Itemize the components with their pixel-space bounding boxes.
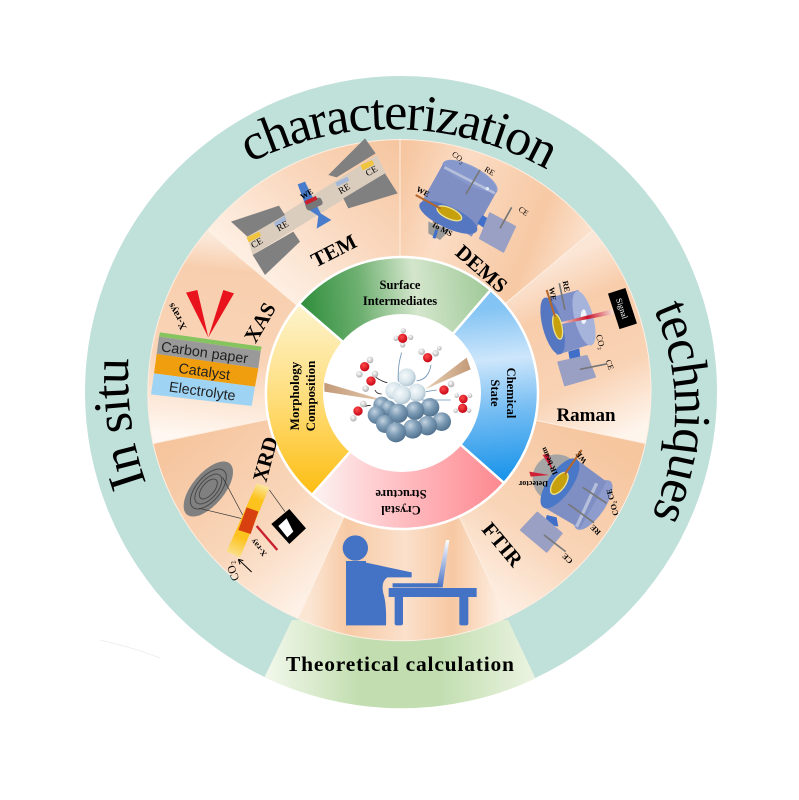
diagram: XAS stack: Carbon paper — [160, 339, 249, 367]
diagram: DEMS cell: WE — [415, 185, 431, 199]
diagram: DEMS cell: To MS — [430, 220, 454, 239]
diagram: DEMS cell: RE — [483, 165, 496, 178]
diagram: Raman cell: CE — [604, 358, 616, 371]
label: Surface Intermediates: Intermediates — [363, 294, 437, 308]
diagram: DEMS cell: CE — [517, 205, 530, 218]
sector: chemical state — [402, 290, 538, 483]
diagram: XRD setup: CO₂ — [224, 560, 242, 582]
sector: TEM — [207, 140, 400, 392]
diagram: Raman cell: Signal — [614, 297, 629, 321]
label: Morphology Composition: Morphology — [287, 361, 302, 430]
label: TEM: TEM — [307, 229, 361, 272]
diagram: TEM cell: CE — [250, 236, 265, 251]
diagram: TEM cell: RE — [275, 219, 291, 234]
diagram: Raman cell: CO₂ — [594, 333, 608, 350]
white centre disc — [323, 314, 481, 472]
diagram: TEM cell: RE — [337, 182, 353, 197]
diagram: Raman cell: RE — [561, 280, 572, 292]
sector: calculation — [298, 392, 507, 641]
diagram: XRD setup — [175, 453, 306, 582]
label: Chemical State: State — [488, 379, 502, 407]
sector: surface intermediates — [299, 257, 491, 393]
peach method ring — [148, 140, 651, 641]
sector: XRD — [153, 392, 400, 618]
inner property ring — [266, 257, 538, 529]
sector: XAS — [148, 230, 400, 444]
diagram: TEM cell: WE — [299, 187, 315, 201]
label: Raman: Raman — [556, 405, 616, 426]
sector: FTIR — [400, 392, 646, 618]
diagram: XAS stack: X-rays — [166, 301, 189, 331]
diagram: FTIR cell: CO₂ CE — [605, 488, 620, 517]
title: In situ: In situ — [95, 359, 146, 492]
illustration: catalyst nanoparticle with water molecules — [324, 328, 472, 442]
diagram: TEM cell: CE — [364, 164, 380, 179]
label: Surface Intermediates: Surface — [380, 278, 421, 292]
sector: morphology composition — [266, 304, 402, 495]
diagram: XRD setup: X-ray — [249, 537, 269, 558]
outer teal ring — [85, 76, 717, 708]
diagram: XAS stack: Catalyst — [177, 361, 231, 384]
label: XRD: XRD — [248, 434, 283, 484]
title: characterization: characterization — [244, 97, 553, 170]
diagram: XAS stack — [151, 290, 262, 406]
diagram: FTIR cell: RE — [588, 523, 603, 537]
diagram: FTIR cell — [518, 445, 620, 566]
diagram: DEMS cell — [415, 150, 530, 252]
faint stroke bottom-left — [100, 640, 160, 658]
diagram: FTIR cell: CE — [560, 551, 575, 566]
label: Theoretical calculation: Theoretical calculation — [286, 652, 514, 676]
diagram: FTIR cell: WE — [574, 450, 589, 466]
sector: crystal structure — [312, 393, 504, 529]
water molecules — [350, 328, 472, 422]
label: Chemical State: Chemical — [504, 368, 518, 419]
label: Crystal Structure: Structure — [375, 487, 427, 501]
sector: Raman — [400, 230, 651, 444]
label: FTIR: FTIR — [477, 518, 528, 572]
title: techniques: techniques — [654, 300, 710, 522]
reaction arrows — [365, 353, 451, 407]
diagram: Raman cell: WE — [547, 287, 558, 301]
diagram: TEM cell — [231, 138, 398, 275]
metal atoms — [368, 368, 451, 442]
label: Morphology Composition: Composition — [303, 360, 318, 431]
diagram: XAS stack: Electrolyte — [168, 379, 236, 405]
theoretical calculation wedge — [264, 620, 536, 708]
label: Crystal Structure: Crystal — [381, 503, 421, 517]
label: XAS: XAS — [239, 298, 281, 347]
diagram: Raman cell — [535, 280, 637, 385]
diagram: FTIR cell: Detector — [518, 479, 548, 488]
probe tips — [324, 358, 471, 402]
label: DEMS: DEMS — [451, 240, 512, 298]
sector: DEMS — [400, 140, 593, 392]
diagram: DEMS cell: CO₂ — [450, 150, 467, 165]
diagram: FTIR cell: IR beam — [539, 445, 560, 476]
icon: person at laptop — [343, 535, 477, 625]
